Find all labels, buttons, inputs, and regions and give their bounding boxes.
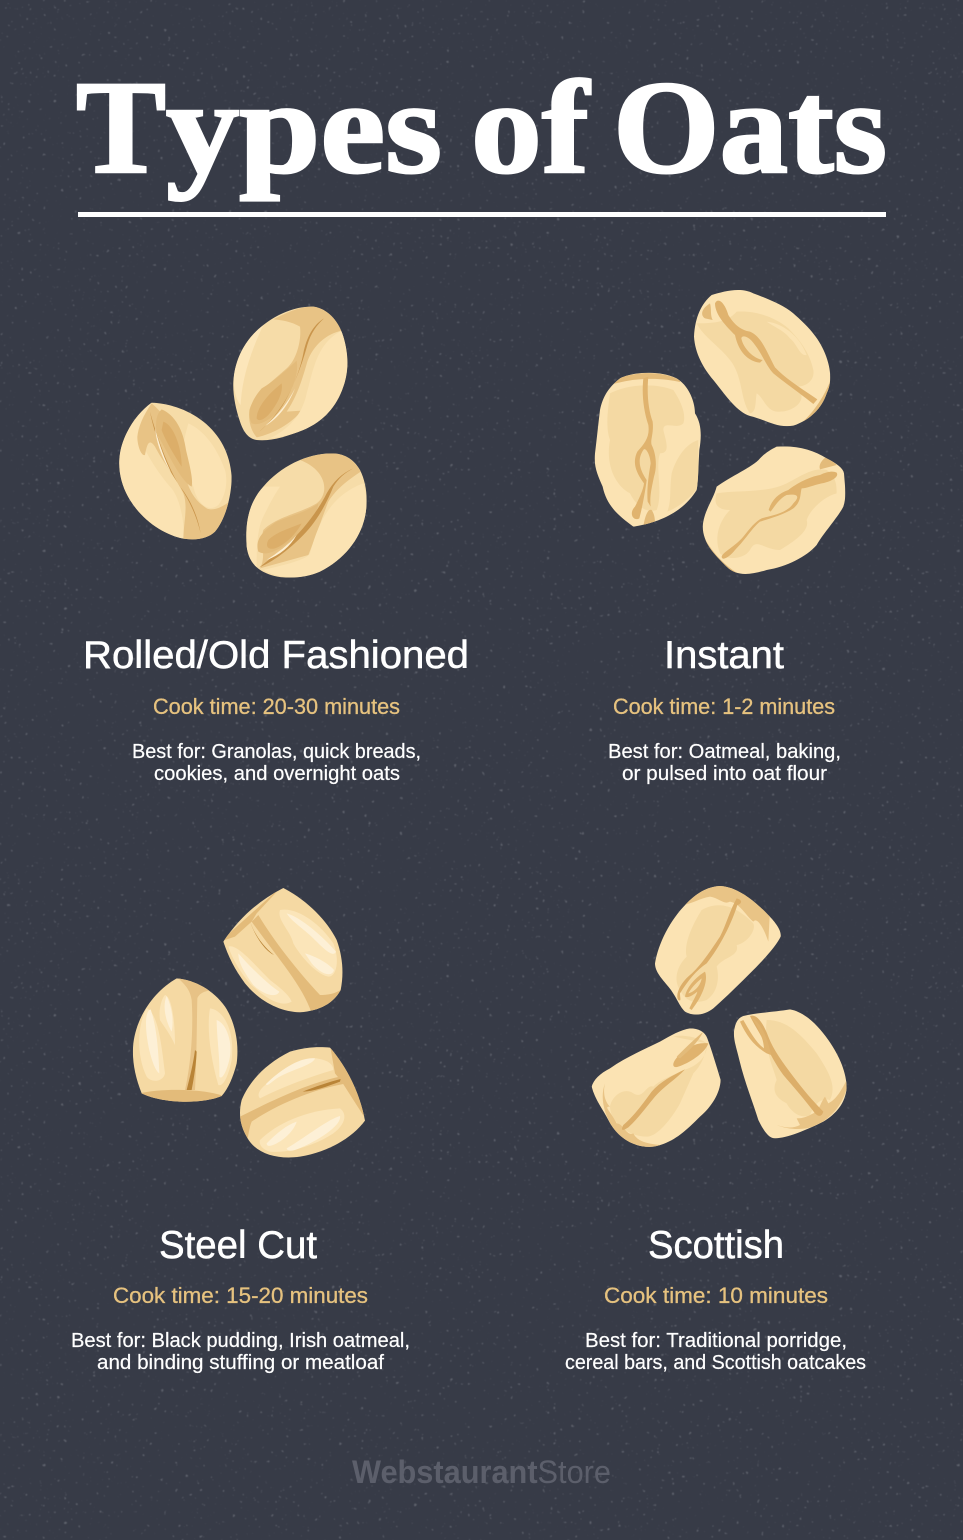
oat: top right: [233, 306, 348, 440]
heading: Steel Cut: [159, 1224, 317, 1267]
oat: top right: [694, 290, 830, 426]
best for: [565, 1329, 866, 1374]
oat: bottom right: [246, 453, 367, 578]
heading: Scottish: [648, 1224, 784, 1267]
oat: bottom right: [734, 1009, 847, 1138]
heading: Rolled/Old Fashioned: [83, 634, 469, 677]
best for: or pulsed into oat flour: [622, 762, 827, 785]
oat: bottom right: [702, 446, 846, 574]
panel: steel cut: [71, 883, 410, 1374]
cook time: Cook time: 1-2 minutes: [613, 694, 835, 719]
oat: top: [655, 886, 781, 1015]
best for: Best for: Black pudding, Irish oatmeal,: [71, 1329, 410, 1352]
illustration: rolled oats: [113, 300, 373, 583]
oat: left: [594, 372, 701, 526]
panel: instant: [590, 283, 850, 785]
cook time: Cook time: 10 minutes: [604, 1283, 828, 1308]
oat: bottom left: [592, 1028, 721, 1147]
heading: Instant: [664, 634, 784, 677]
best for: [608, 740, 841, 785]
logo: WebstaurantStore: WebstaurantStore: [352, 1454, 611, 1490]
title: [76, 53, 887, 217]
best for: Best for: Traditional porridge,: [585, 1329, 847, 1352]
cook time: Cook time: 20-30 minutes: [153, 694, 400, 719]
illustration: instant oats: [590, 283, 850, 580]
best for: Best for: Granolas, quick breads,: [132, 740, 421, 763]
best for: cookies, and overnight oats: [154, 762, 400, 785]
panel: scottish: [565, 880, 866, 1374]
panel: rolled / old fashioned: [83, 300, 469, 785]
oat: bottom right: [240, 1047, 365, 1158]
title: T: [76, 53, 166, 201]
title: of: [471, 53, 591, 201]
title: Oats: [613, 53, 887, 201]
best for: Best for: Oatmeal, baking,: [608, 740, 841, 763]
illustration: steel cut oats: [130, 883, 370, 1160]
best for: and binding stuffing or meatloaf: [97, 1351, 384, 1374]
cook time: Cook time: 15-20 minutes: [113, 1283, 368, 1308]
oat: left: [119, 402, 232, 540]
title: ypes: [166, 53, 442, 201]
best for: cereal bars, and Scottish oatcakes: [565, 1351, 866, 1374]
best for: [132, 740, 421, 785]
illustration: scottish oats: [588, 880, 850, 1153]
best for: [71, 1329, 410, 1374]
oat: left: [132, 978, 238, 1102]
oat: top right: [223, 888, 342, 1012]
